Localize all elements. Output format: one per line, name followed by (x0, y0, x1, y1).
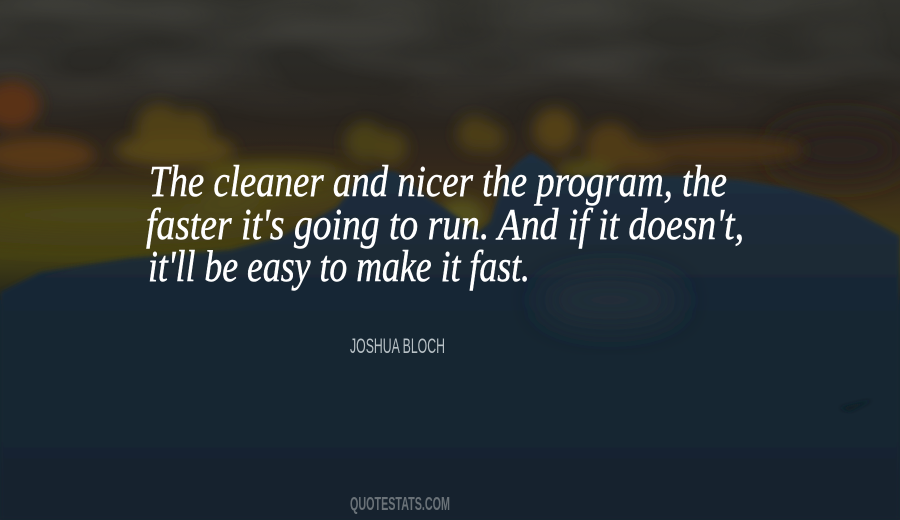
background: sunset sky (0, 0, 900, 300)
quote line 2: faster it's going to run. And if it doesn't, (146, 200, 744, 249)
site watermark: QUOTESTATS.COM (350, 494, 450, 514)
author name: JOSHUA BLOCH (350, 335, 445, 358)
orange and yellow clouds (0, 81, 805, 231)
quote line 3: it'll be easy to make it fast. (148, 242, 530, 291)
background: dark blue mountains (0, 153, 900, 520)
quote text (146, 157, 744, 291)
quote line 1: The cleaner and nicer the program, the (149, 157, 727, 206)
